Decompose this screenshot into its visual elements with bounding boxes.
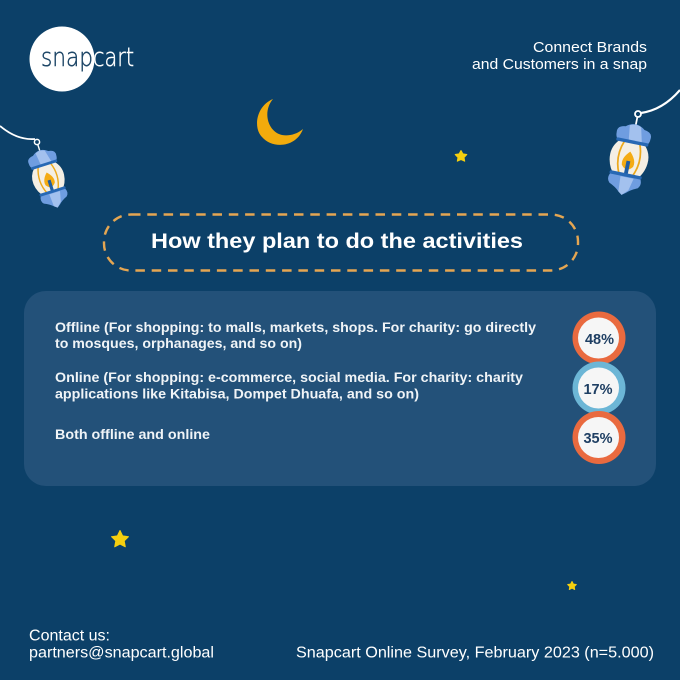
badge: 17%: 17% xyxy=(583,382,613,398)
icon: star right xyxy=(568,582,576,590)
panel: activities xyxy=(24,291,656,486)
option: offline: Offline (For shopping: to malls, markets, shops. For charity: go directly xyxy=(55,320,537,335)
option: offline: to mosques, orphanages, and so on) xyxy=(55,336,302,351)
contact xyxy=(29,628,214,662)
icon: star left xyxy=(112,530,128,547)
contact: Contact us: xyxy=(29,628,110,644)
source: Snapcart Online Survey, February 2023 (n=5.000) xyxy=(296,644,654,662)
icon: right lantern xyxy=(603,90,680,199)
badge: 35%: 35% xyxy=(583,431,613,447)
icon: crescent moon xyxy=(257,99,303,145)
option: online xyxy=(55,370,524,402)
option: both: Both offline and online xyxy=(55,427,211,442)
tagline: Connect Brands xyxy=(533,40,647,56)
option: offline xyxy=(55,320,537,351)
option: online: applications like Kitabisa, Dompet Dhuafa, and so on) xyxy=(55,386,419,402)
icon: star top xyxy=(455,150,467,161)
logo: snapcart: snap xyxy=(41,43,93,73)
badge: 48% xyxy=(572,312,626,364)
tagline: and Customers in a snap xyxy=(472,57,647,73)
logo: snapcart: cart xyxy=(93,43,134,73)
badge: 17% xyxy=(572,362,626,414)
badge: 48%: 48% xyxy=(585,332,614,348)
icon: left lantern xyxy=(0,126,73,212)
logo: snapcart xyxy=(30,26,134,92)
tagline xyxy=(472,40,647,73)
heading box xyxy=(104,214,578,270)
badge: 35% xyxy=(572,411,626,464)
option: online: Online (For shopping: e-commerce, social media. For charity: charity xyxy=(55,370,524,385)
heading box: How they plan to do the activities xyxy=(151,229,523,253)
contact: partners@snapcart.global xyxy=(29,644,214,662)
